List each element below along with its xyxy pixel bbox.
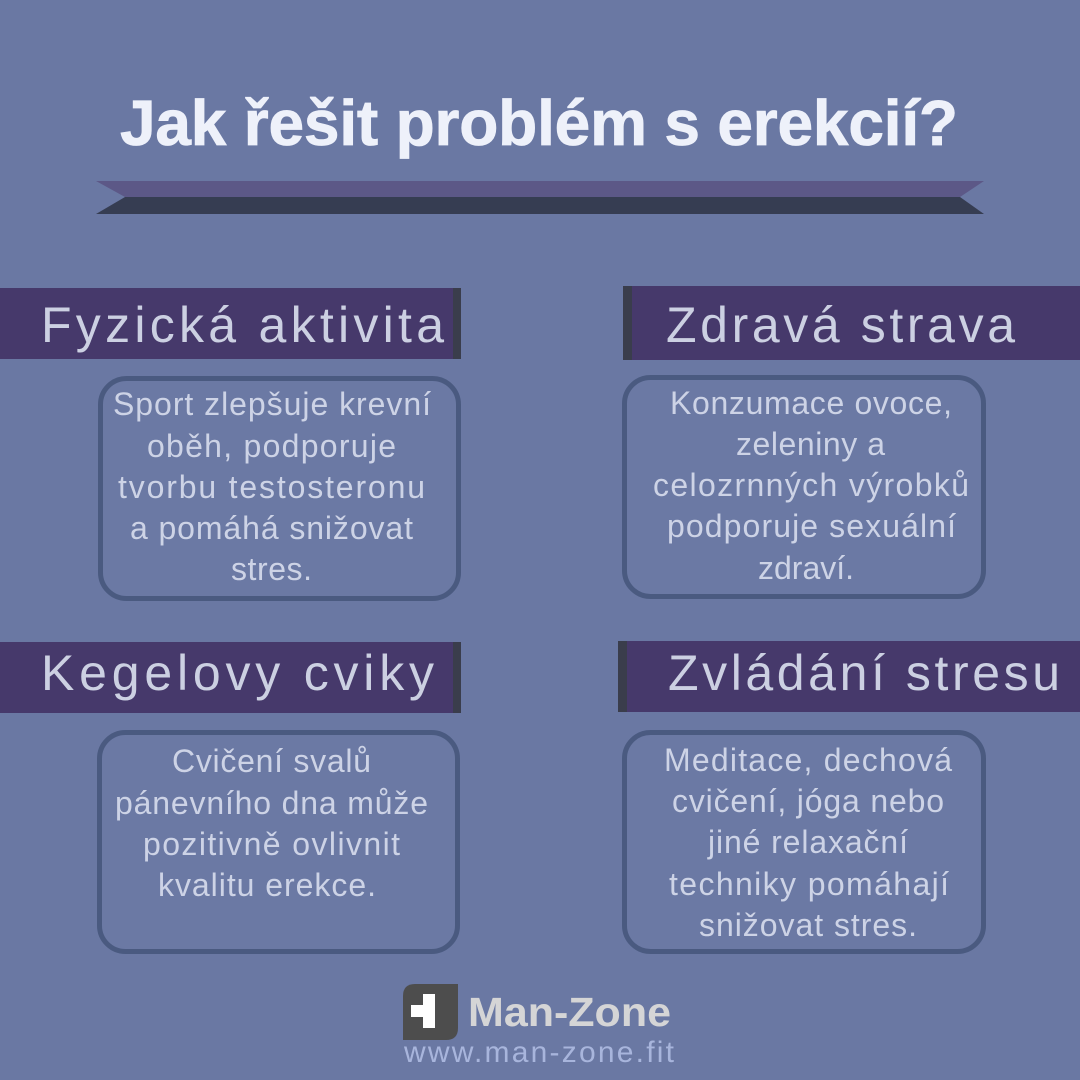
title: Jak řešit problém s erekcií? xyxy=(120,87,958,159)
panel: Fyzická aktivita xyxy=(0,288,461,598)
card: Zvládání stresu text xyxy=(624,732,984,952)
heading banner: Kegelovy cviky xyxy=(0,642,461,713)
card: Zdravá strava text xyxy=(624,378,984,596)
card: Zvládání stresu text: cvičení, jóga nebo xyxy=(672,783,944,819)
card: Zdravá strava text: celozrnných výrobků xyxy=(653,467,969,503)
logo: Man-Zone xyxy=(403,984,671,1040)
heading banner: Fyzická aktivita xyxy=(0,288,461,359)
card: Zvládání stresu text: Meditace, dechová xyxy=(664,742,952,778)
card: Fyzická aktivita text xyxy=(100,378,458,598)
card: Zvládání stresu text: jiné relaxační xyxy=(707,824,908,860)
card: Zdravá strava text: zeleniny a xyxy=(736,426,885,462)
card: Kegelovy cviky text xyxy=(100,732,458,952)
logo wordmark: Man-Zone xyxy=(468,989,671,1035)
card: Kegelovy cviky text: kvalitu erekce. xyxy=(158,867,376,903)
card: Fyzická aktivita text: a pomáhá snižovat xyxy=(130,510,413,546)
panel: Zvládání stresu xyxy=(618,641,1080,952)
heading banner: Zdravá strava xyxy=(623,286,1080,360)
heading banner: Kegelovy cviky: Kegelovy cviky xyxy=(41,645,434,701)
card: Fyzická aktivita text: stres. xyxy=(231,551,312,587)
heading banner: Zdravá strava: Zdravá strava xyxy=(666,297,1015,353)
heading banner: Zvládání stresu xyxy=(618,641,1080,712)
card: Zdravá strava text: zdraví. xyxy=(758,550,854,586)
card: Kegelovy cviky text: pánevního dna může xyxy=(115,785,428,821)
panel: Zdravá strava xyxy=(623,286,1080,596)
card: Zdravá strava text: Konzumace ovoce, xyxy=(670,385,952,421)
card: Fyzická aktivita text: Sport zlepšuje krevní xyxy=(113,386,431,422)
heading banner: Fyzická aktivita: Fyzická aktivita xyxy=(41,297,444,353)
card: Zdravá strava text: podporuje sexuální xyxy=(667,508,956,544)
website url: www.man-zone.fit xyxy=(403,1036,675,1069)
panel: Kegelovy cviky xyxy=(0,642,461,952)
heading banner: Zvládání stresu: Zvládání stresu xyxy=(668,645,1060,701)
title ribbon xyxy=(96,181,984,214)
card: Kegelovy cviky text: Cvičení svalů xyxy=(172,743,371,779)
card: Zvládání stresu text: techniky pomáhají xyxy=(669,866,949,902)
icon: logo mark xyxy=(403,984,458,1040)
card: Kegelovy cviky text: pozitivně ovlivnit xyxy=(143,826,400,862)
card: Fyzická aktivita text: oběh, podporuje xyxy=(147,428,396,464)
card: Zvládání stresu text: snižovat stres. xyxy=(699,907,917,943)
card: Fyzická aktivita text: tvorbu testosteronu xyxy=(118,469,425,505)
